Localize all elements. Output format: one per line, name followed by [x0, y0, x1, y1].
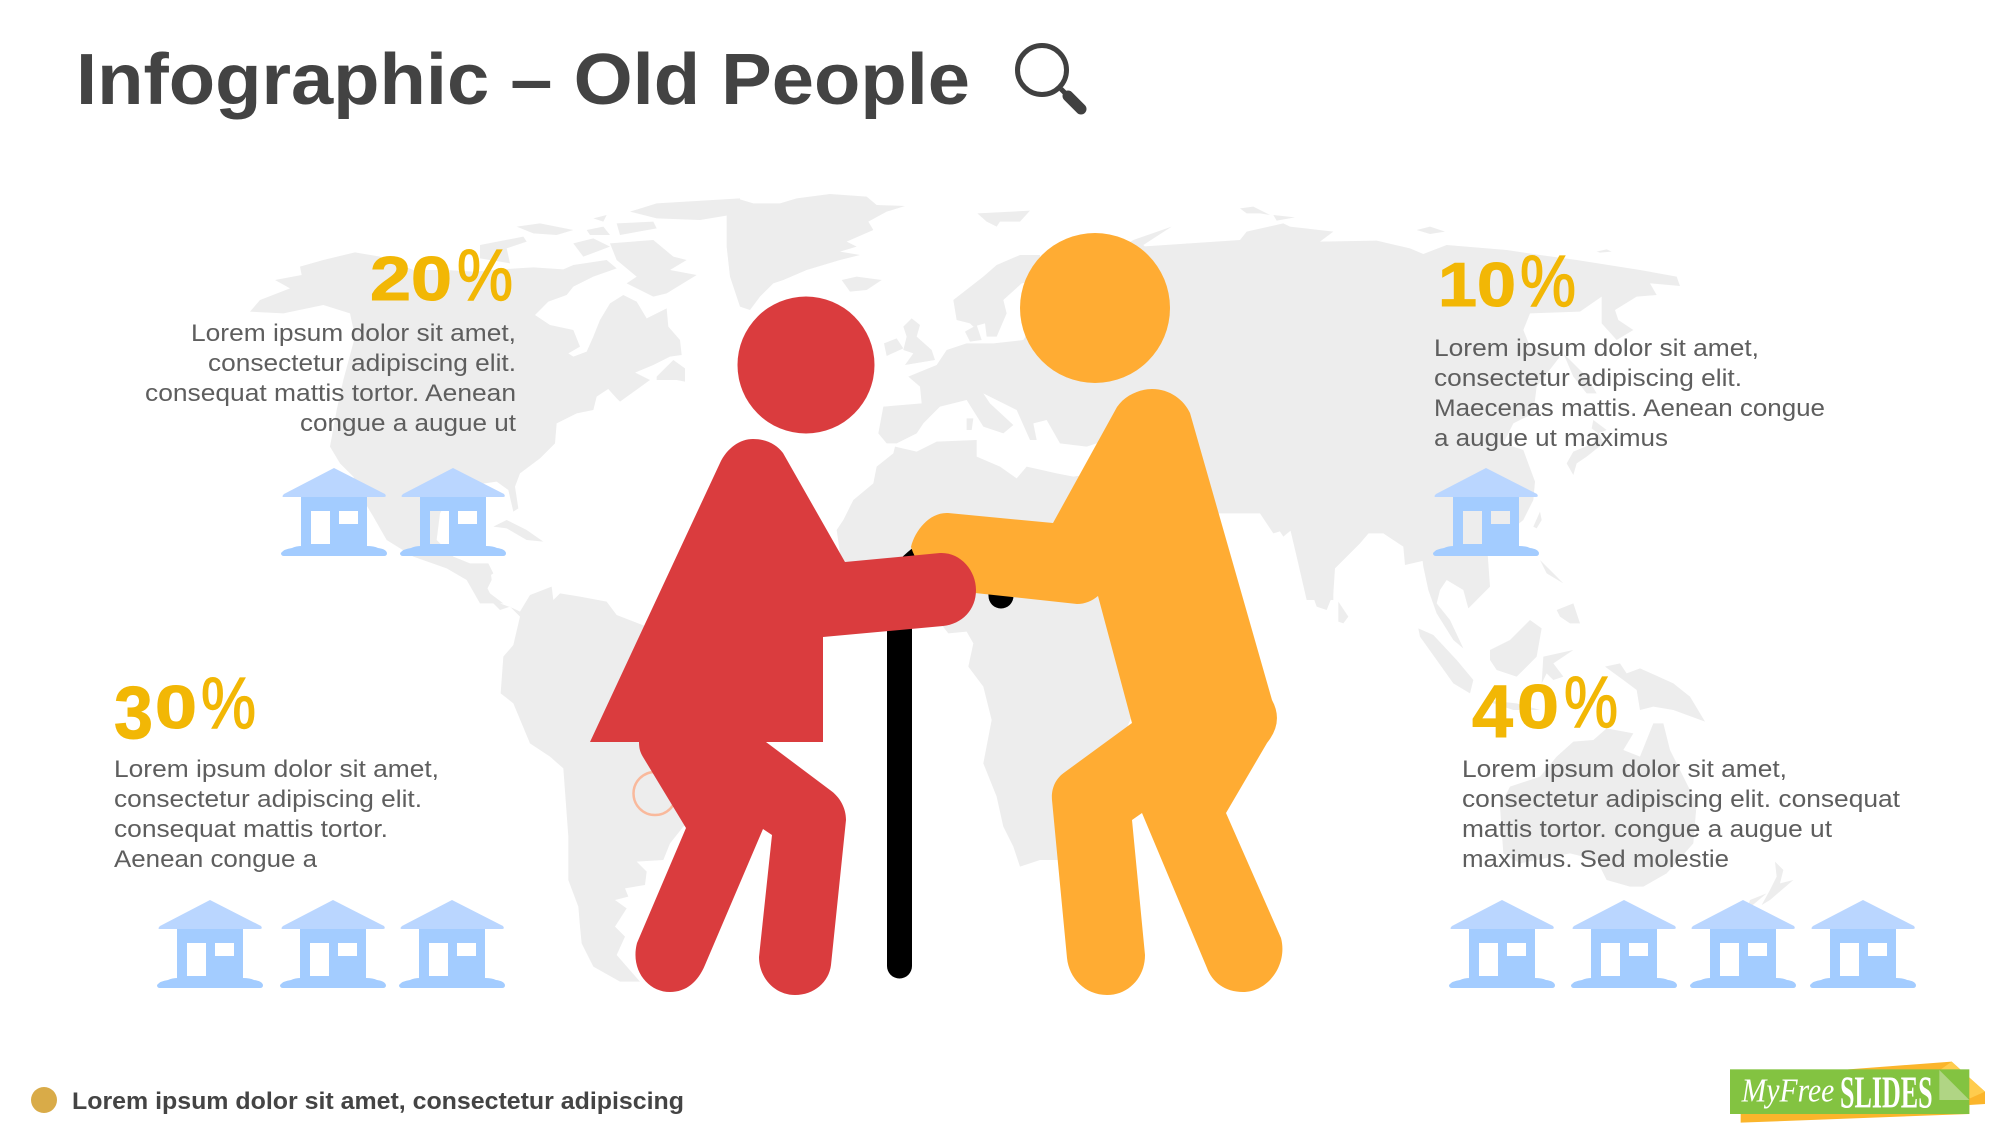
orange body: [911, 389, 1282, 995]
figure: red person: [590, 296, 976, 995]
icon: walking cane: [900, 546, 1001, 966]
footer bullet: [31, 1087, 57, 1113]
text block: 20% description: [145, 320, 516, 437]
text block: 20% description: Lorem ipsum dolor sit amet,: [191, 320, 516, 347]
orange head: [1020, 233, 1170, 383]
stat block: 20%: %: [457, 236, 513, 316]
text block: 30% description: Aenean congue a: [114, 846, 318, 873]
map: India, Africa south: [880, 480, 1387, 867]
logo: MyFreeSlides: [1730, 1062, 1985, 1123]
stat block: 30%: [114, 664, 439, 873]
stat block: 10%: %: [1520, 242, 1576, 322]
text block: 40% description: mattis tortor. congue a augue ut: [1462, 816, 1832, 843]
text block: 10% description: [1434, 335, 1825, 452]
icons: houses 40%: [1449, 900, 1916, 988]
logo: MyFreeSlides: SLIDES: [1840, 1067, 1933, 1118]
text block: 40% description: maximus. Sed molestie: [1462, 846, 1729, 873]
icons: houses 20%: [281, 468, 506, 556]
map: Asia: [1140, 207, 1680, 600]
map: Greenland, Europe, North Africa: [727, 194, 1260, 613]
text block: 20% description: consequat mattis tortor. Aenean: [145, 380, 516, 407]
text block: 30% description: [114, 756, 439, 873]
map: South America: [480, 567, 713, 982]
logo: MyFreeSlides: MyFree: [1741, 1073, 1835, 1110]
world map background: [250, 194, 1793, 982]
title: Infographic – Old People: [76, 40, 970, 120]
text block: 30% description: Lorem ipsum dolor sit amet,: [114, 756, 439, 783]
icons: houses 30%: [157, 900, 505, 988]
icon: house 10%: [1433, 468, 1539, 556]
red body: [590, 439, 976, 995]
stat block: 40%: 4: [1472, 670, 1513, 753]
stat block: 40%: 0: [1517, 673, 1559, 742]
stat block: 10%: 10: [1438, 251, 1516, 320]
text block: 10% description: consectetur adipiscing elit.: [1434, 365, 1742, 392]
text block: 40% description: consectetur adipiscing elit. consequat: [1462, 786, 1900, 813]
text block: 10% description: Maecenas mattis. Aenean congue: [1434, 395, 1825, 422]
stat block: 10%: [1434, 242, 1825, 452]
stat block: 40%: %: [1564, 663, 1618, 743]
stat block: 20%: 20: [370, 245, 452, 314]
stat block: 40%: [1462, 663, 1900, 873]
red head: [738, 296, 874, 434]
stat block: 30%: %: [201, 664, 256, 744]
text block: 10% description: a augue ut maximus: [1434, 425, 1668, 452]
stat block: 30%: 3: [114, 671, 153, 754]
map: North America and Arctic islands: [250, 198, 740, 603]
map: South-East Asia and Oceania: [1418, 540, 1793, 910]
stat block: 20%: [145, 236, 516, 437]
stat block: 30%: 0: [155, 674, 197, 741]
figure: orange person: [911, 233, 1282, 995]
text block: 20% description: congue a augue ut: [300, 410, 516, 437]
footer text: Lorem ipsum dolor sit amet, consectetur adipiscing: [72, 1088, 684, 1115]
text block: 30% description: consequat mattis tortor.: [114, 816, 388, 843]
text block: 40% description: [1462, 756, 1900, 873]
icon: magnifying glass: [1018, 46, 1081, 109]
text block: 20% description: consectetur adipiscing elit.: [208, 350, 516, 377]
text block: 10% description: Lorem ipsum dolor sit amet,: [1434, 335, 1759, 362]
text block: 40% description: Lorem ipsum dolor sit amet,: [1462, 756, 1787, 783]
decorative ring marker: [634, 772, 676, 815]
text block: 30% description: consectetur adipiscing elit.: [114, 786, 422, 813]
